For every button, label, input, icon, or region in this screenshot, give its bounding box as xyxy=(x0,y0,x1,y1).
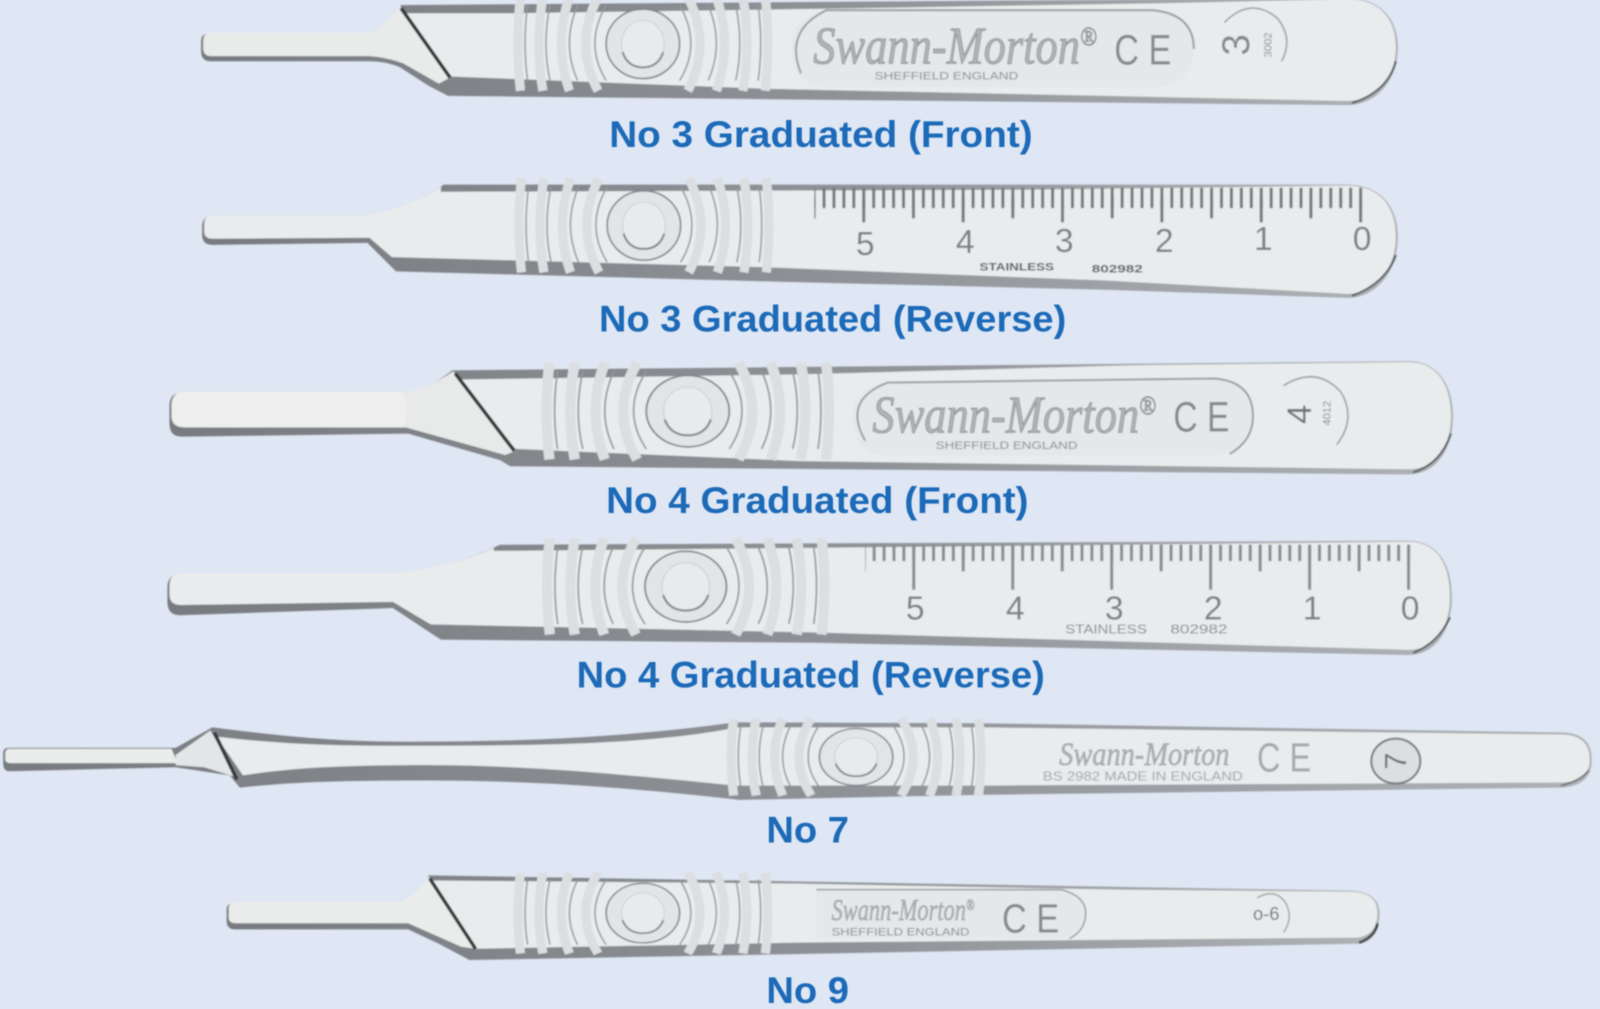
ruler numbers: 3 xyxy=(1105,590,1124,627)
ruler numbers: 1 xyxy=(1303,590,1322,627)
size stamp 4 xyxy=(1281,377,1348,445)
size stamp 3: 3 xyxy=(1215,34,1258,56)
label: No 4 reverse: No 4 Graduated (Reverse) xyxy=(577,655,1045,696)
size stamp 3 xyxy=(1215,8,1287,61)
handle: No 9 xyxy=(227,873,1379,960)
label: No 4 front: No 4 Graduated (Front) xyxy=(606,480,1029,521)
ruler numbers: 4 xyxy=(1006,590,1025,627)
size stamp 7 xyxy=(1371,739,1420,784)
handle: No 3 Graduated front xyxy=(201,0,1398,105)
size stamp 7: 7 xyxy=(1379,753,1413,770)
ruler numbers: 1 xyxy=(1254,221,1273,258)
ruler numbers: 2 xyxy=(1204,590,1223,627)
ruler numbers: 4 xyxy=(956,224,975,261)
size stamp 4: 4012 xyxy=(1322,401,1334,426)
logo cartouche xyxy=(816,890,1086,939)
sheffield text: SHEFFIELD ENGLAND xyxy=(832,927,969,939)
ruler ticks xyxy=(865,553,1410,567)
size stamp 9: o-6 xyxy=(1253,903,1280,924)
stainless marking: 802982 xyxy=(1092,263,1143,275)
ruler numbers xyxy=(906,590,1419,627)
sheffield text: SHEFFIELD ENGLAND xyxy=(874,71,1018,83)
size stamp 4: 4 xyxy=(1281,405,1319,424)
CE mark: C E xyxy=(1114,26,1171,74)
ruler ticks xyxy=(814,198,1362,210)
handle: No 4 Graduated front xyxy=(170,361,1453,474)
size stamp 3: 3002 xyxy=(1262,32,1274,57)
CE mark: C E xyxy=(1173,394,1230,442)
label: No 3 reverse: No 3 Graduated (Reverse) xyxy=(599,299,1066,340)
label: No 3 front: No 3 Graduated (Front) xyxy=(609,114,1033,155)
ruler numbers: 3 xyxy=(1055,223,1074,260)
size stamp 9 xyxy=(1253,894,1289,932)
CE mark: C E xyxy=(1257,734,1311,780)
ruler numbers: 5 xyxy=(906,590,925,627)
stainless marking: STAINLESS xyxy=(1065,622,1147,637)
stainless marking: STAINLESS xyxy=(980,261,1055,273)
handle: No 7 xyxy=(3,719,1592,800)
brand logo text: ® xyxy=(966,897,975,914)
ruler numbers: 5 xyxy=(856,226,875,263)
brand logo text: ® xyxy=(1139,390,1156,420)
CE mark: C E xyxy=(1002,895,1059,941)
sheffield text: SHEFFIELD ENGLAND xyxy=(936,440,1078,452)
handle: No 3 Graduated reverse xyxy=(202,179,1398,298)
BS marking: BS 2982 MADE IN ENGLAND xyxy=(1043,768,1243,783)
stainless marking xyxy=(980,261,1143,275)
brand logo text: ® xyxy=(1080,21,1097,51)
ruler numbers xyxy=(856,221,1372,263)
logo cartouche xyxy=(791,10,1194,88)
brand logo text: Swann-Morton xyxy=(1059,737,1230,773)
logo cartouche xyxy=(852,379,1253,456)
ruler numbers: 0 xyxy=(1353,221,1372,258)
label: No 7: No 7 xyxy=(766,810,849,851)
stainless marking: 802982 xyxy=(1170,622,1227,637)
handle: No 4 Graduated reverse xyxy=(167,539,1452,655)
ruler numbers: 2 xyxy=(1155,223,1174,260)
brand logo text: Swann-Morton xyxy=(872,387,1191,445)
brand logo text: Swann-Morton xyxy=(813,17,1132,75)
ruler numbers: 0 xyxy=(1401,590,1419,627)
stainless marking xyxy=(1065,622,1227,637)
brand logo text: Swann-Morton xyxy=(832,893,1015,927)
